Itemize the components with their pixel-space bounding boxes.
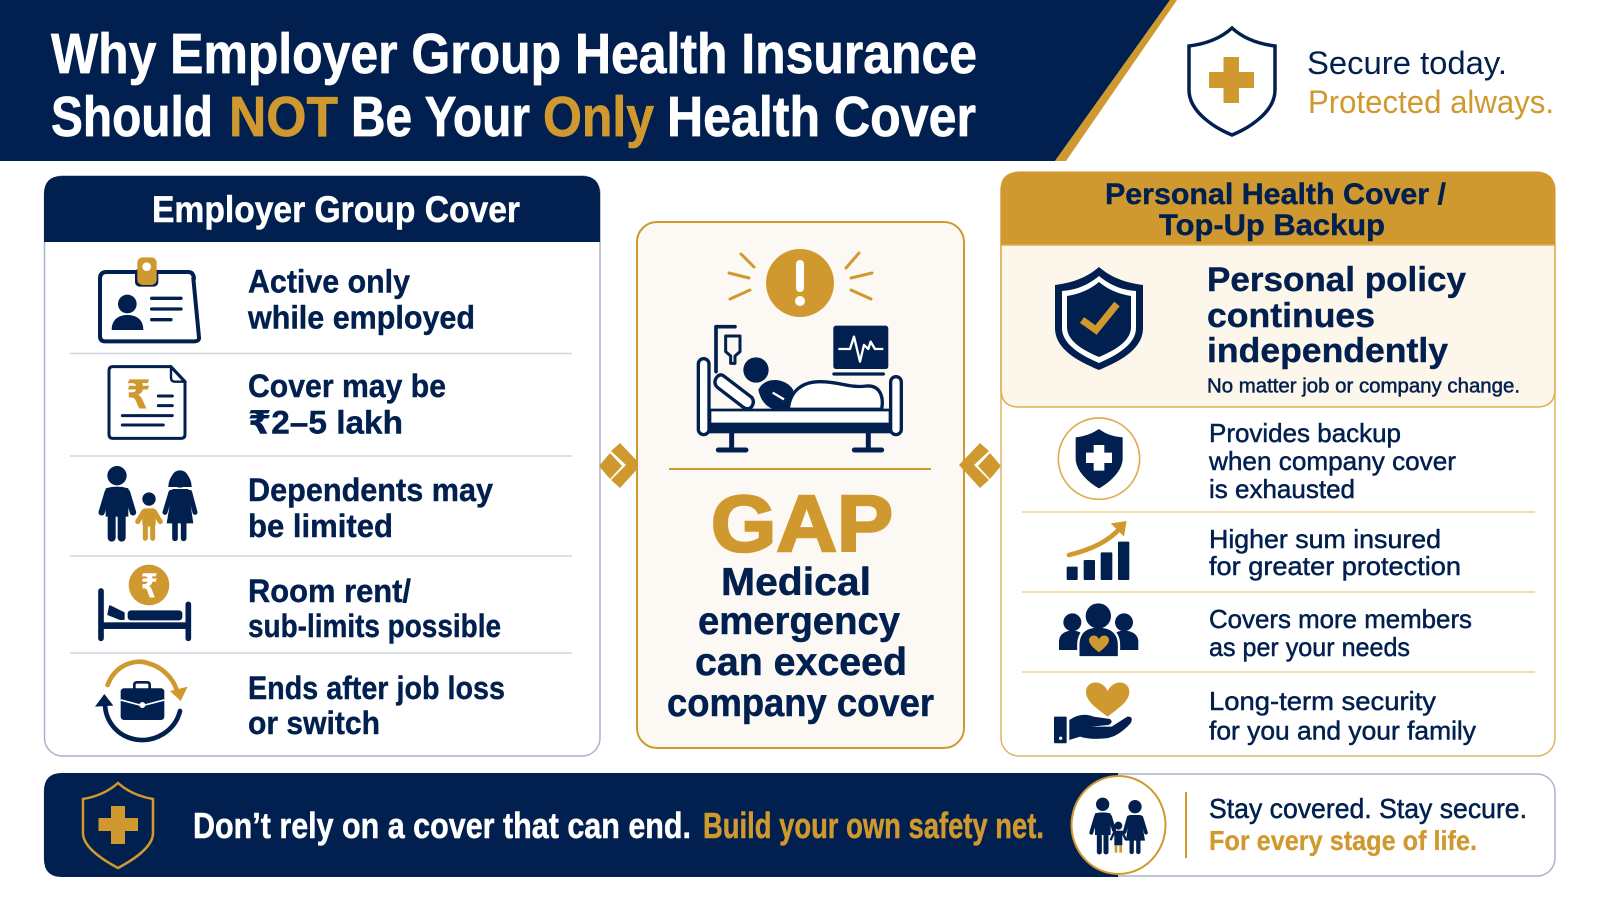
icon: shield in circle <box>1058 418 1140 499</box>
text: medical emergency can exceed company cover: emergency <box>698 600 900 643</box>
icon: ID card <box>100 257 199 341</box>
title: Be Your <box>351 85 530 149</box>
text: higher sum insured: for greater protection <box>1209 551 1461 581</box>
title <box>51 22 977 149</box>
arrow: right panel to gap <box>959 443 1001 488</box>
text: cover may be 2-5 lakh: ₹2–5 lakh <box>248 404 403 440</box>
heading: personal health cover top-up backup <box>1105 178 1447 242</box>
icon: briefcase with cycle arrows <box>95 662 188 740</box>
icon: shield with plus <box>1189 28 1275 135</box>
text: ends after job loss or switch: or switch <box>248 705 380 741</box>
icon: gold shield with plus <box>83 783 153 868</box>
text: higher sum insured <box>1209 524 1461 581</box>
text: long-term security <box>1209 686 1476 746</box>
callout: personal policy continues independently: No matter job or company change. <box>1207 374 1520 398</box>
icon: bed with rupee coin: ₹ <box>141 569 158 606</box>
text: dependents may be limited: Dependents may <box>248 472 493 508</box>
footer banner <box>44 773 1555 877</box>
text: cover may be 2-5 lakh: Cover may be <box>248 368 446 404</box>
callout: personal policy continues independently <box>1001 245 1555 407</box>
text: dependents may be limited <box>248 472 493 544</box>
text: dependents may be limited: be limited <box>248 508 393 544</box>
text: room rent sub-limits possible <box>248 573 501 644</box>
text: medical emergency can exceed company cover: company cover <box>667 682 934 725</box>
icon: growth chart <box>1067 521 1129 580</box>
title: Only <box>543 85 654 149</box>
text: provides backup: when company cover <box>1208 446 1456 476</box>
text: long-term security: for you and your family <box>1209 716 1476 746</box>
text: active only while employed: while employed <box>247 300 475 336</box>
callout: personal policy continues independently: Personal policy <box>1207 261 1466 299</box>
text: call to action <box>193 805 1044 846</box>
icon: bed with rupee coin <box>101 565 188 638</box>
text: covers more members: as per your needs <box>1209 632 1410 662</box>
text: long-term security: Long-term security <box>1209 686 1436 716</box>
text: provides backup <box>1208 418 1456 504</box>
text: covers more members <box>1209 604 1472 662</box>
text: ends after job loss or switch <box>248 670 505 741</box>
icon: shield with check <box>1055 267 1143 370</box>
text: medical emergency can exceed company cover <box>667 561 934 725</box>
callout: personal policy continues independently: continues <box>1207 297 1375 335</box>
text: ends after job loss or switch: Ends after job loss <box>248 670 505 706</box>
title: Health Cover <box>667 85 976 149</box>
text: cover may be 2-5 lakh <box>248 368 446 440</box>
text: medical emergency can exceed company cover: can exceed <box>695 641 907 684</box>
icon: hospital bed patient <box>698 326 901 450</box>
icon: family <box>102 466 195 538</box>
tagline: Protected always. <box>1308 84 1554 120</box>
panel: employer group cover <box>44 176 600 756</box>
title: Should <box>51 85 213 149</box>
text: stay covered: Stay covered. Stay secure. <box>1209 793 1527 824</box>
text: active only while employed: Active only <box>248 264 410 300</box>
icon: hand with heart <box>1054 683 1132 743</box>
panel: personal health cover <box>1000 172 1555 756</box>
tagline <box>1307 45 1554 120</box>
text: covers more members: Covers more members <box>1209 604 1472 634</box>
tagline: Secure today. <box>1307 45 1507 81</box>
icon: rupee document <box>109 367 185 438</box>
text: room rent sub-limits possible: Room rent/ <box>248 573 411 609</box>
text: higher sum insured: Higher sum insured <box>1209 524 1441 554</box>
heading: employer group cover: Employer Group Cover <box>152 189 520 230</box>
text: call to action: Build your own safety net. <box>703 805 1044 846</box>
title: NOT <box>229 85 338 149</box>
icon: alert <box>729 249 872 317</box>
icon: family in circle <box>1072 776 1166 874</box>
icon: group with heart <box>1059 603 1138 657</box>
arrow: left panel to gap <box>599 443 641 488</box>
text: stay covered: For every stage of life. <box>1209 825 1477 856</box>
title: Why Employer Group Health Insurance <box>51 22 977 86</box>
header banner <box>0 0 1177 161</box>
callout: personal policy continues independently: independently <box>1207 332 1448 370</box>
text: active only while employed <box>247 264 475 336</box>
text: call to action: Don’t rely on a cover that can end. <box>193 805 691 846</box>
panel: gap <box>637 222 964 748</box>
text: provides backup: Provides backup <box>1209 418 1401 448</box>
heading: personal health cover top-up backup: Personal Health Cover / <box>1105 178 1447 211</box>
icon: rupee document: ₹ <box>126 373 151 417</box>
text: stay covered <box>1209 793 1527 856</box>
text: medical emergency can exceed company cover: Medical <box>721 561 871 604</box>
heading: personal health cover top-up backup: Top-Up Backup <box>1159 209 1385 242</box>
text: room rent sub-limits possible: sub-limits possible <box>248 608 501 644</box>
text: provides backup: is exhausted <box>1209 474 1355 504</box>
heading: GAP: GAP <box>711 479 893 568</box>
